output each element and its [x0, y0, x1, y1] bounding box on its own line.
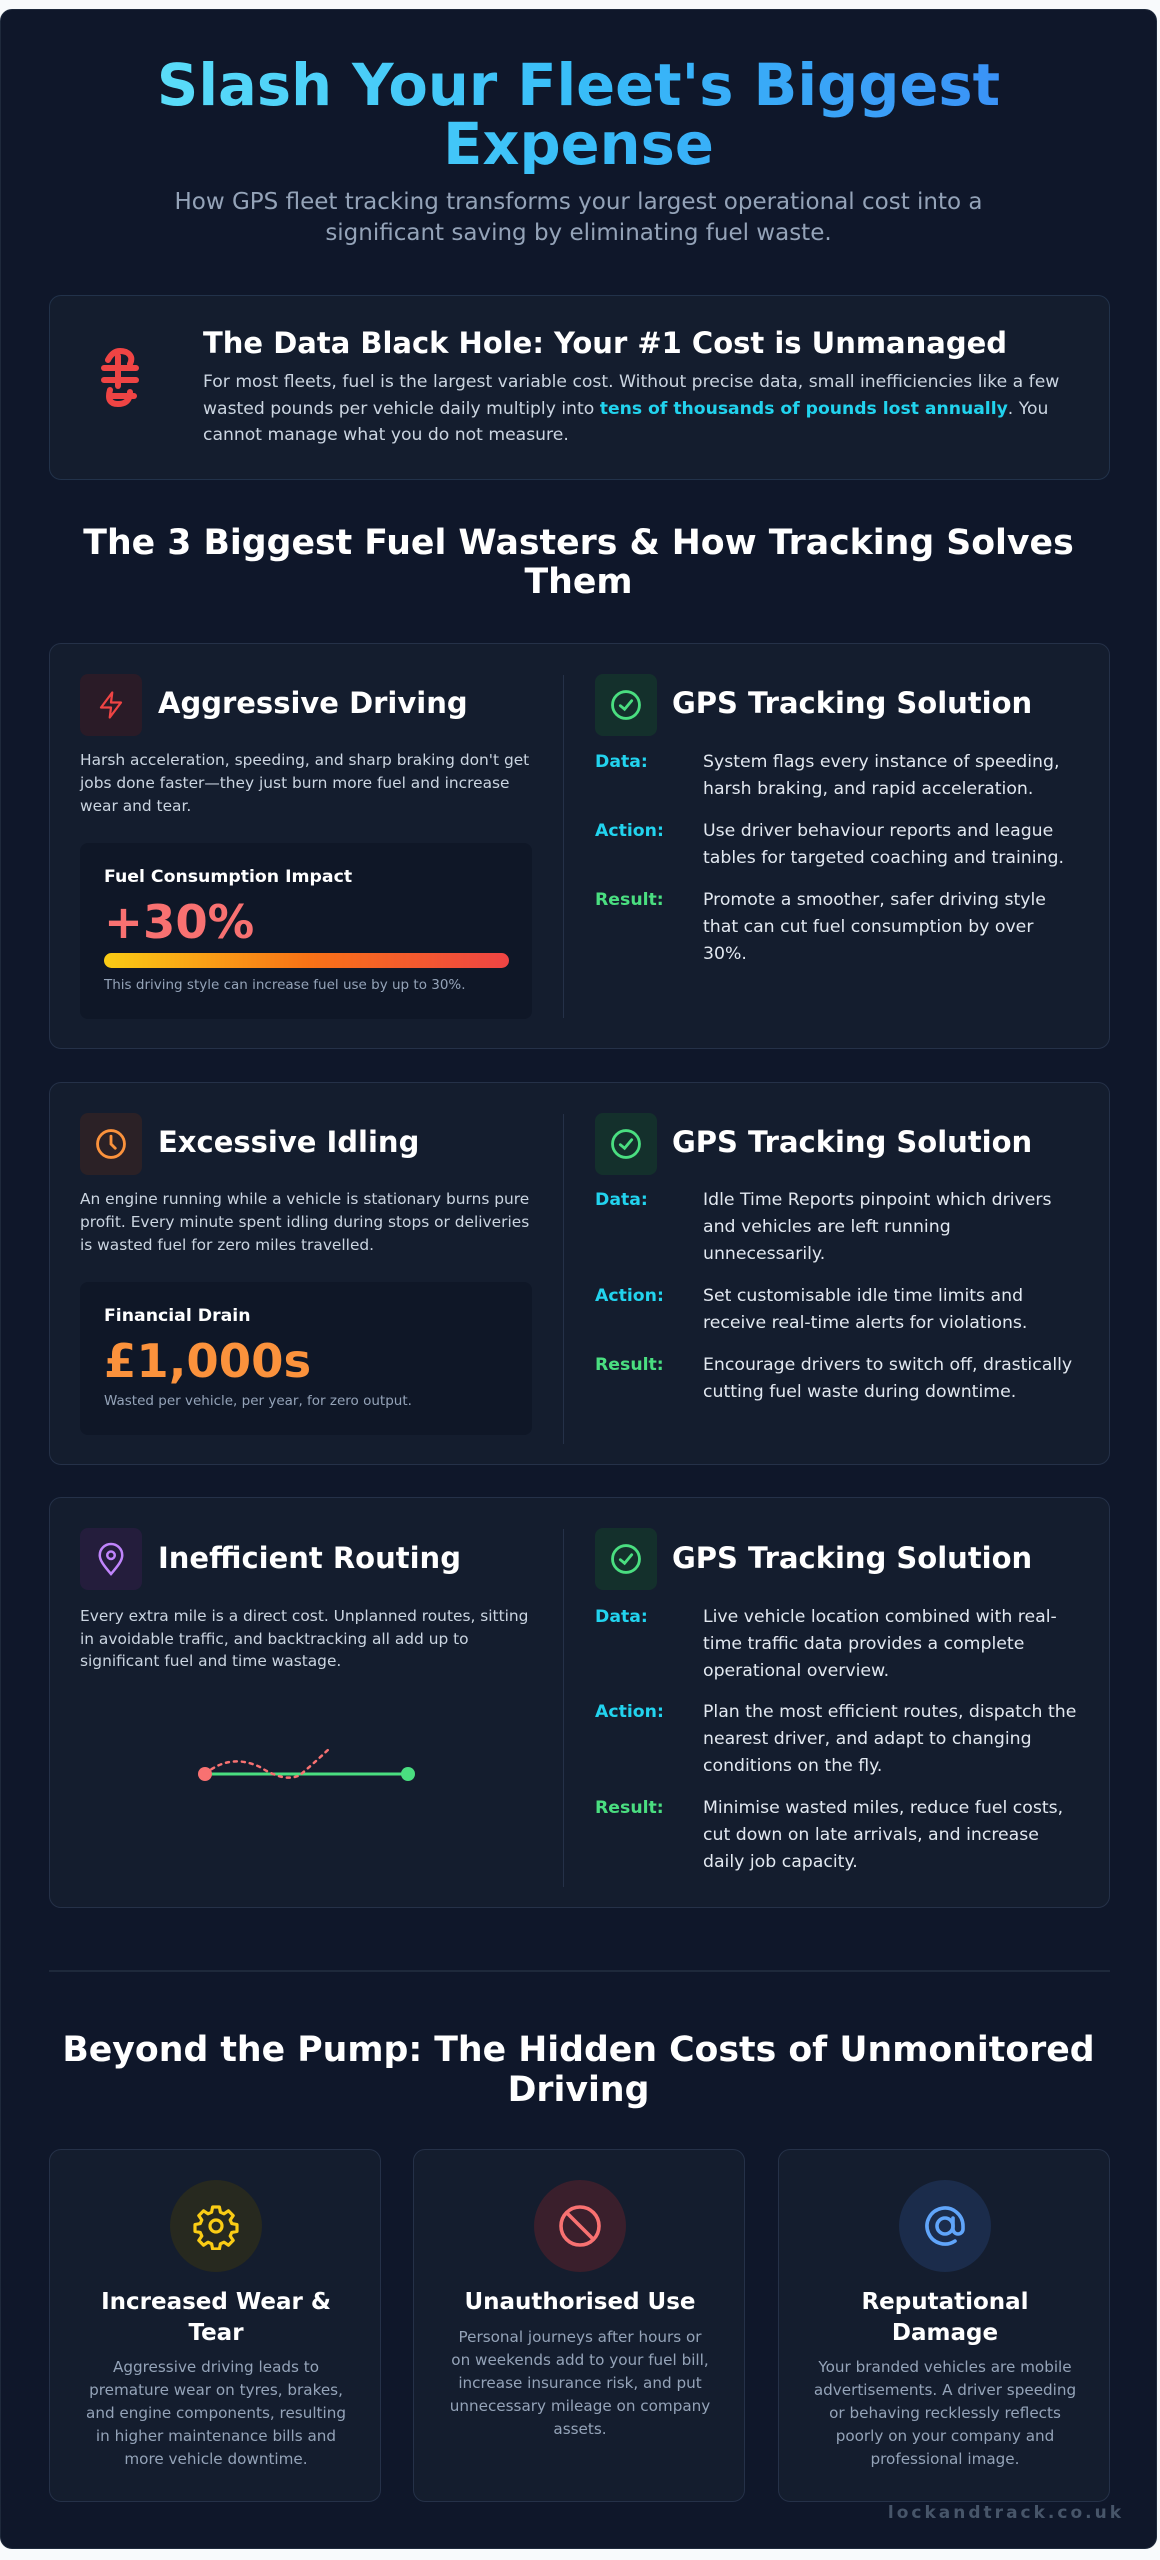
body text: wasted pounds per vehicle daily multiply into tens of thousands of pounds lost annually. You — [203, 398, 1048, 418]
solution list 3: Plan the most efficient routes, dispatch the — [703, 1702, 1076, 1722]
solution list 3: daily job capacity. — [703, 1852, 858, 1872]
panel: data black hole — [49, 295, 1110, 480]
text: assets. — [553, 2420, 607, 2438]
solution list 1: 30%. — [703, 944, 747, 964]
text: or behaving recklessly reflects — [829, 2404, 1061, 2422]
solution list 2: Idle Time Reports pinpoint which drivers — [703, 1190, 1052, 1210]
heading: solution: GPS Tracking Solution — [672, 686, 1032, 720]
text: idling desc: is wasted fuel for zero miles travelled. — [80, 1236, 374, 1254]
text: aggressive desc: Harsh acceleration, speeding, and sharp braking don't get — [80, 751, 529, 769]
text: Your branded vehicles are mobile — [818, 2358, 1072, 2376]
solution list 1: Result: — [595, 890, 664, 910]
stat box: fuel consumption: +30% — [104, 895, 254, 949]
text: idling desc: An engine running while a vehicle is stationary burns pure — [80, 1190, 529, 1208]
text — [86, 2358, 346, 2468]
solution list 2: and vehicles are left running — [703, 1217, 951, 1237]
panel: unauthorised use — [413, 2149, 745, 2502]
text: aggressive desc: jobs done faster—they just burn more fuel and increase — [80, 774, 510, 792]
stat box: fuel consumption: Fuel Consumption Impact — [104, 867, 352, 887]
icon: bolt — [80, 674, 142, 736]
solution list 2: Data: — [595, 1190, 648, 1210]
solution list 3: nearest driver, and adapt to changing — [703, 1729, 1032, 1749]
stat box: financial drain: Wasted per vehicle, per year, for zero output. — [104, 1393, 412, 1409]
solution list 2: Set customisable idle time limits and — [703, 1286, 1023, 1306]
panel: inefficient routing — [49, 1497, 1110, 1908]
icon: gear — [170, 2180, 262, 2272]
solution list 3: Result: — [595, 1798, 664, 1818]
text: routing desc: in avoidable traffic, and backtracking all add up to — [80, 1630, 469, 1648]
icon: clock — [80, 1113, 142, 1175]
footer brand: lockandtrack.co.uk — [888, 2503, 1124, 2523]
heading: aggressive driving: Aggressive Driving — [158, 686, 468, 720]
text — [814, 2358, 1076, 2468]
solution list 1: harsh braking, and rapid acceleration. — [703, 779, 1033, 799]
solution list 1: Data: — [595, 752, 648, 772]
heading: The Data Black Hole: Your #1 Cost is Unmanaged — [203, 326, 1007, 360]
solution list 1: Action: — [595, 821, 664, 841]
title: Reputational — [861, 2289, 1029, 2315]
title: Tear — [188, 2320, 244, 2346]
solution list 3: Action: — [595, 1702, 664, 1722]
text: aggressive desc — [80, 751, 529, 815]
solution list 1: Promote a smoother, safer driving style — [703, 890, 1046, 910]
solution list 2: cutting fuel waste during downtime. — [703, 1382, 1016, 1402]
title — [861, 2289, 1029, 2346]
solution list 3: Live vehicle location combined with real- — [703, 1607, 1057, 1627]
solution list 2: receive real-time alerts for violations. — [703, 1313, 1027, 1333]
text: more vehicle downtime. — [124, 2450, 308, 2468]
subtitle — [174, 189, 982, 246]
body text: cannot manage what you do not measure. — [203, 425, 569, 445]
text: professional image. — [870, 2450, 1019, 2468]
icon: check — [595, 674, 657, 736]
icon: fuel cost — [101, 348, 139, 407]
solution list 3: Minimise wasted miles, reduce fuel costs, — [703, 1798, 1063, 1818]
section heading: fuel wasters — [83, 523, 1074, 602]
text: and engine components, resulting — [86, 2404, 346, 2422]
text: increase insurance risk, and put — [458, 2374, 702, 2392]
text: routing desc: Every extra mile is a direct cost. Unplanned routes, sitting — [80, 1607, 528, 1625]
icon: at — [899, 2180, 991, 2272]
title: Increased Wear & — [101, 2289, 331, 2315]
heading: solution: GPS Tracking Solution — [672, 1541, 1032, 1575]
text: unnecessary mileage on company — [450, 2397, 710, 2415]
text: in higher maintenance bills and — [96, 2427, 336, 2445]
text — [450, 2328, 710, 2438]
text: Personal journeys after hours or — [458, 2328, 702, 2346]
solution list 1: tables for targeted coaching and training. — [703, 848, 1064, 868]
heading: idling: Excessive Idling — [158, 1125, 419, 1159]
stat box: financial drain: Financial Drain — [104, 1306, 251, 1326]
text: advertisements. A driver speeding — [814, 2381, 1076, 2399]
icon: check — [595, 1113, 657, 1175]
title: Damage — [892, 2320, 998, 2346]
title: Expense — [443, 111, 714, 178]
section heading: fuel wasters: Them — [524, 562, 633, 602]
text: poorly on your company and — [836, 2427, 1054, 2445]
body text: For most fleets, fuel is the largest variable cost. Without precise data, small inefficiencies like a few — [203, 372, 1059, 392]
solution list 1: System flags every instance of speeding, — [703, 752, 1059, 772]
stat box: financial drain — [80, 1282, 532, 1435]
text: on weekends add to your fuel bill, — [451, 2351, 709, 2369]
chart: route diagram — [198, 1748, 415, 1781]
text: routing desc: significant fuel and time wastage. — [80, 1652, 341, 1670]
panel: reputational damage — [778, 2149, 1110, 2502]
panel: aggressive driving — [49, 643, 1110, 1049]
solution list 2: Result: — [595, 1355, 664, 1375]
solution list 2: unnecessarily. — [703, 1244, 825, 1264]
stat box: financial drain: £1,000s — [104, 1334, 311, 1388]
text: idling desc — [80, 1190, 529, 1254]
icon: check — [595, 1528, 657, 1590]
solution list 2: Action: — [595, 1286, 664, 1306]
solution list 1: Use driver behaviour reports and league — [703, 821, 1053, 841]
section heading: fuel wasters: The 3 Biggest Fuel Wasters & How Tracking Solves — [83, 523, 1074, 563]
solution list 3: operational overview. — [703, 1661, 889, 1681]
solution list 3: conditions on the fly. — [703, 1756, 882, 1776]
title: Unauthorised Use — [464, 2289, 696, 2315]
solution list 1: that can cut fuel consumption by over — [703, 917, 1033, 937]
solution list 1 — [595, 752, 1064, 964]
stat box: fuel consumption: This driving style can increase fuel use by up to 30%. — [104, 977, 466, 993]
solution list 2: Encourage drivers to switch off, drastically — [703, 1355, 1072, 1375]
text: idling desc: profit. Every minute spent idling during stops or deliveries — [80, 1213, 529, 1231]
icon: pin — [80, 1528, 142, 1590]
solution list 3: Data: — [595, 1607, 648, 1627]
panel: wear & tear — [49, 2149, 381, 2502]
title — [0, 56, 1157, 174]
subtitle: significant saving by eliminating fuel waste. — [325, 220, 832, 246]
heading: solution: GPS Tracking Solution — [672, 1125, 1032, 1159]
subtitle: How GPS fleet tracking transforms your largest operational cost into a — [174, 189, 982, 215]
solution list 3: cut down on late arrivals, and increase — [703, 1825, 1039, 1845]
text: Aggressive driving leads to — [113, 2358, 319, 2376]
solution list 3: time traffic data provides a complete — [703, 1634, 1024, 1654]
title — [101, 2289, 331, 2346]
solution list 3 — [595, 1607, 1076, 1872]
text: aggressive desc: wear and tear. — [80, 797, 191, 815]
body text — [203, 372, 1059, 445]
text: routing desc — [80, 1607, 528, 1670]
icon: ban — [534, 2180, 626, 2272]
solution list 2 — [595, 1190, 1072, 1402]
stat box: fuel consumption — [80, 843, 532, 1019]
section heading: hidden costs: Driving — [508, 2070, 649, 2110]
section heading: hidden costs: Beyond the Pump: The Hidden Costs of Unmonitored — [62, 2030, 1095, 2070]
text: premature wear on tyres, brakes, — [89, 2381, 343, 2399]
section heading: hidden costs — [62, 2030, 1095, 2110]
heading: routing: Inefficient Routing — [158, 1541, 461, 1575]
panel: excessive idling — [49, 1082, 1110, 1465]
title: Slash Your Fleet's Biggest — [157, 52, 1000, 119]
